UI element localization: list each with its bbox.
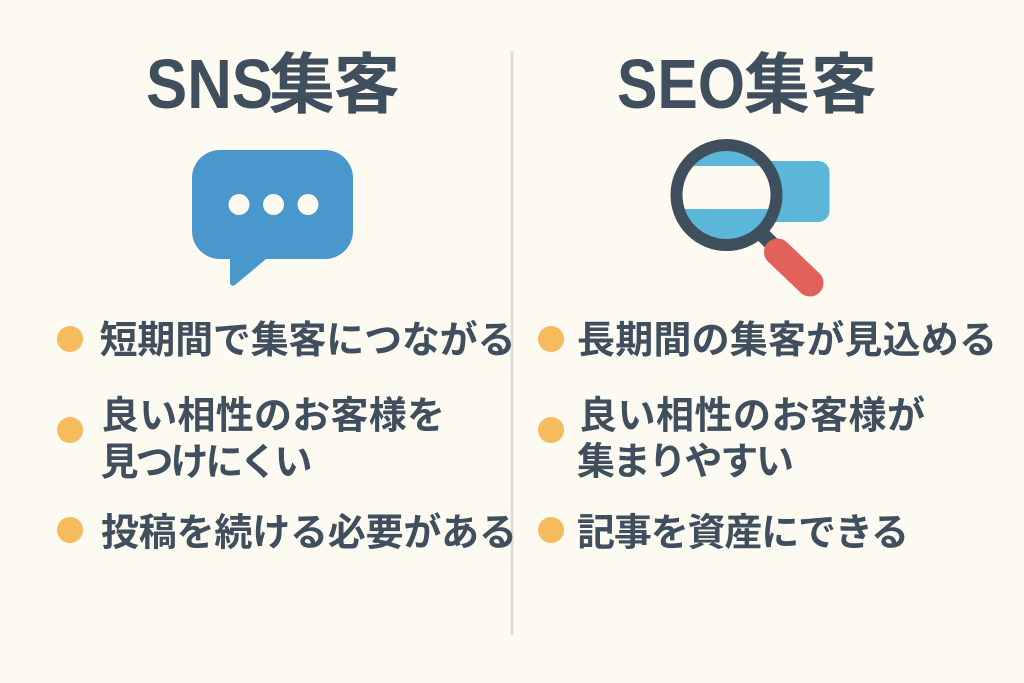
bullet: 長期間の集客が見込める: 長期間の集客が見込める [577,320,997,362]
icon: magnifying glass over search bar [670,145,830,283]
heading: SNS集客: SNS [146,45,273,123]
panel: SNS集客 [57,45,517,554]
heading: SNS集客 [146,45,400,123]
bullet: 良い相性のお客様を見つけにくい [57,396,445,484]
panel: SEO集客 [538,45,997,554]
bullet: 良い相性のお客様を見つけにくい: 良い相性のお客様を [101,396,445,438]
heading: SNS集客: 集客 [269,48,400,122]
bullet: 記事を資産にできる: 記事を資産にできる [577,512,909,554]
bullet: 良い相性のお客様が集まりやすい: 集まりやすい [577,442,794,484]
heading: SEO集客 [617,45,877,123]
bullet: 投稿を続ける必要がある: 投稿を続ける必要がある [101,512,517,554]
bullet: 短期間で集客につながる: 短期間で集客につながる [100,320,516,362]
bullet: 良い相性のお客様が集まりやすい: 良い相性のお客様が [579,396,925,438]
icon: speech bubble [192,150,353,286]
heading: SEO集客: 集客 [744,48,877,122]
bullet: 良い相性のお客様を見つけにくい: 見つけにくい [100,442,312,484]
heading: SEO集客: SEO [617,45,745,123]
bullet: 良い相性のお客様が集まりやすい [538,396,925,484]
